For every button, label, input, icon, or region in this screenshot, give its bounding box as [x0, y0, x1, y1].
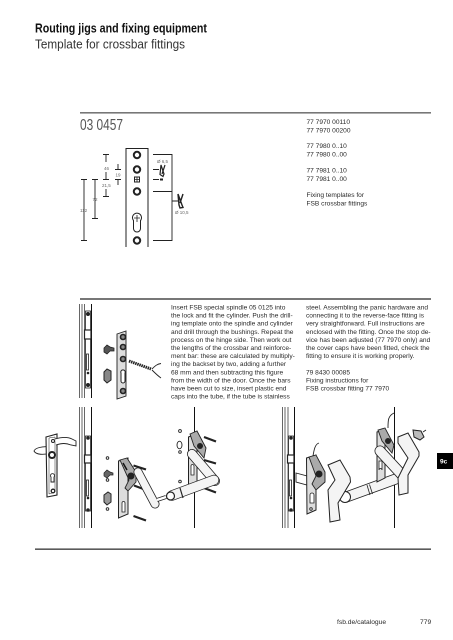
door edges	[282, 407, 288, 528]
template on door	[117, 331, 126, 399]
instruction text column 1: ing the backset by two, adding a further	[171, 361, 287, 368]
door edge	[80, 304, 84, 398]
section tab: 9c	[440, 458, 448, 466]
instruction text column 1: the lengths of the crossbar and reinforce-	[171, 345, 291, 352]
instruction text column 1: ing template onto the spindle and cylinder	[171, 321, 294, 328]
product code: 03 0457	[80, 117, 123, 134]
dimension labels: 19	[116, 172, 121, 178]
article number list: 77 7980 0..10	[306, 143, 347, 150]
instruction text column 1: Insert FSB special spindle 05 0125 into	[171, 304, 286, 312]
instruction text column 1	[171, 304, 295, 401]
article number list: 77 7981 0..10	[306, 168, 347, 174]
footer: fsb.de/catalogue	[337, 619, 386, 626]
section tab	[437, 453, 453, 469]
screws	[134, 437, 216, 520]
illustration: handle and panic bar fitting	[34, 407, 216, 528]
article number list: 77 7980 0..00	[306, 152, 347, 158]
article number list: 77 7970 00110	[306, 119, 350, 126]
instruction text column 1: from the width of the door. Once the bars	[171, 377, 291, 384]
technical drawing: drilling template	[80, 148, 189, 247]
crossbar	[172, 480, 214, 496]
lock case	[288, 436, 294, 511]
illustration: assembled panic hardware	[282, 407, 426, 528]
connector	[157, 497, 166, 500]
drill bit icons	[160, 165, 183, 208]
instruction text column 1: process on the hinge side. Then work out	[171, 337, 292, 344]
article number list: FSB crossbar fittings	[306, 200, 368, 208]
article number list: Fixing templates for	[306, 192, 365, 199]
instruction text column 1: the lock and fit the cylinder. Push the drill-	[171, 313, 293, 320]
instruction text column 2: enclosed with the fitting. Once the stop de-	[306, 329, 431, 336]
left cover cap	[328, 460, 350, 522]
leader lines	[153, 154, 178, 240]
crossbar	[345, 476, 404, 498]
title: Template for crossbar fittings	[35, 38, 185, 52]
spindle and cylinder	[104, 345, 114, 354]
instruction text column 2: vice has been adjusted (77 7970 only) and	[306, 337, 431, 344]
instruction text column 2	[306, 304, 431, 393]
dimension labels: 21,5	[102, 183, 111, 188]
instruction text column 1: 68 mm and then subtracting this figure	[171, 369, 283, 376]
dimension labels: 112	[80, 208, 88, 213]
lock case	[84, 311, 91, 388]
instruction text column 1: have been cut to size, insert plastic end	[171, 386, 287, 392]
end cap	[413, 430, 424, 440]
small parts	[104, 457, 113, 510]
instruction text column 1: caps into the tube, if the tube is stainless	[171, 394, 290, 401]
article number list	[306, 119, 368, 208]
illustration: drilling the door	[80, 304, 161, 399]
drill bit	[129, 361, 151, 369]
right fitting	[377, 413, 394, 482]
dimension labels: Ø 6,5	[157, 159, 169, 164]
instruction text column 2: 79 8430 00085	[306, 370, 350, 376]
instruction text column 1: ment bar: these are calculated by multiply-	[171, 353, 295, 360]
arm left	[138, 472, 155, 504]
article number list: 77 7981 0..00	[306, 176, 347, 183]
door edges	[80, 407, 84, 528]
dimension labels	[80, 159, 189, 215]
instruction text column 2: very straightforward. Full instructions are	[306, 321, 425, 328]
instruction text column 2: fitting to ensure it is working properly.	[306, 353, 415, 360]
right fitting	[177, 430, 206, 486]
arm right	[192, 454, 215, 481]
article number list: 77 7970 00200	[306, 128, 351, 134]
dimension labels: Ø 10,5	[175, 210, 189, 215]
lock case	[84, 436, 91, 511]
right arm	[380, 451, 403, 476]
template plate	[126, 148, 148, 247]
dimension labels: 46	[104, 166, 110, 171]
instruction text column 2: the cover caps have been fitted, check the	[306, 345, 430, 352]
footer: 779	[420, 619, 431, 626]
dimension labels: 72	[92, 197, 98, 202]
instruction text column 2: Fixing instructions for	[306, 378, 369, 385]
instruction text column 2: FSB crossbar fitting 77 7970	[306, 386, 390, 393]
left fitting	[118, 458, 136, 518]
lever handle	[34, 434, 76, 497]
instruction text column 2: connecting it to the reverse-face fitting is	[306, 313, 425, 320]
title: Routing jigs and fixing equipment	[35, 22, 208, 36]
right cover cap	[398, 433, 419, 495]
instruction text column 1: and drill through the bushings. Repeat the	[171, 329, 294, 336]
footer	[337, 619, 431, 626]
left fitting	[296, 443, 325, 514]
title	[35, 22, 208, 52]
dimension lines	[81, 154, 121, 240]
instruction text column 2: steel. Assembling the panic hardware and	[306, 304, 428, 312]
